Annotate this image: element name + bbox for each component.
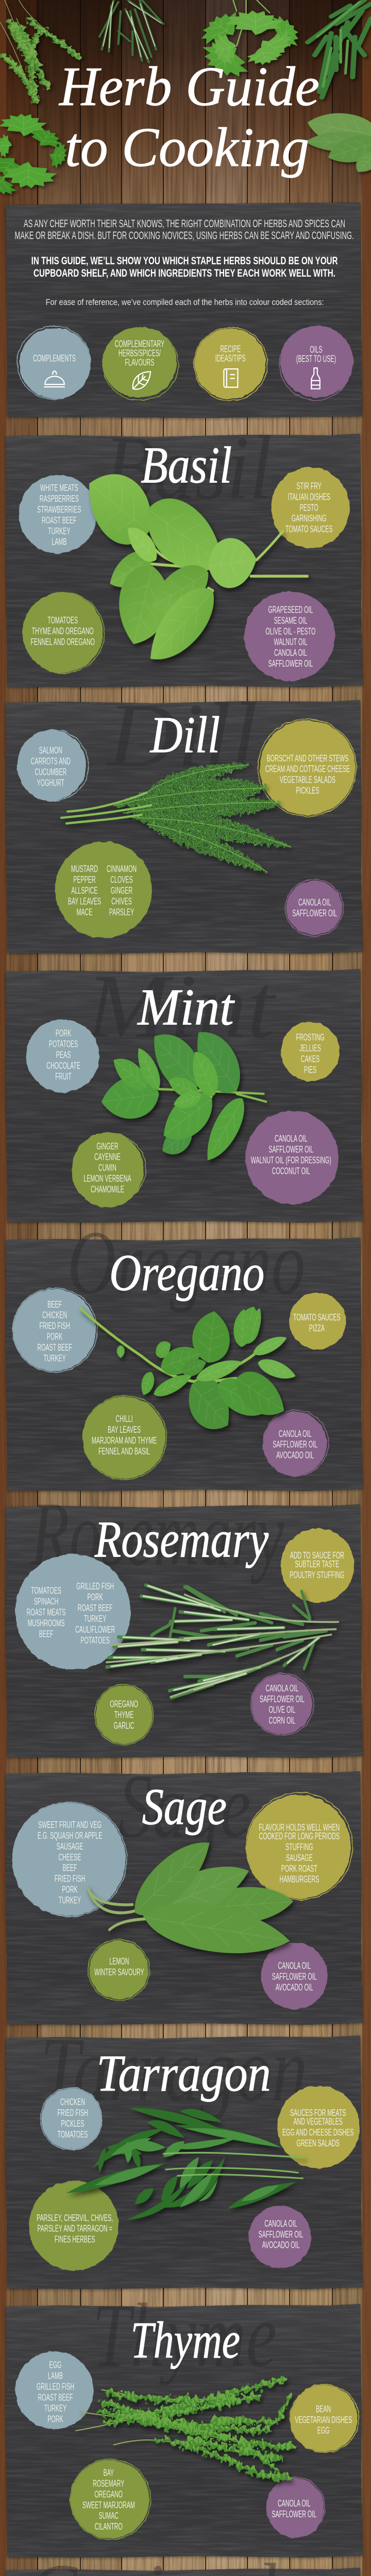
recipes: PICKLES xyxy=(296,786,319,796)
legend: complementary herbs: FLAVOURS xyxy=(125,357,154,368)
herb: rosemary xyxy=(107,1585,339,1698)
complements: ROAST BEEF xyxy=(42,515,77,526)
recipes: STIR FRY xyxy=(296,481,322,492)
complements: BEEF xyxy=(62,1863,77,1874)
herb: coriander xyxy=(193,0,306,83)
complements: TURKEY xyxy=(44,2403,66,2414)
recipes: BORSCHT AND OTHER STEWS xyxy=(267,753,348,764)
panel: introduction and legend xyxy=(6,202,362,418)
complements: TOMATOES xyxy=(31,1586,61,1597)
recipes: CAKES xyxy=(301,1054,319,1064)
complementary herbs: MUSTARD xyxy=(71,864,98,875)
complements xyxy=(18,730,89,801)
complements: FRUIT xyxy=(55,1071,72,1082)
complementary herbs xyxy=(83,1396,166,1480)
complements: CHICKEN xyxy=(60,2097,85,2108)
complements: E.G. SQUASH OR APPLE xyxy=(38,1831,102,1841)
heading: oregano: Oregano xyxy=(109,1244,264,1302)
complementary herbs: CINNAMON xyxy=(107,864,137,875)
oils: SESAME OIL xyxy=(274,615,307,626)
complements: CARROTS AND xyxy=(31,756,71,767)
complements xyxy=(15,1554,130,1670)
ghost heading: Sage xyxy=(119,1755,251,1857)
recipes: TOMATO SAUCES xyxy=(293,1312,341,1323)
heading: tarragon: Tarragon xyxy=(96,2045,271,2103)
intro text xyxy=(14,218,353,242)
oils: CORN OIL xyxy=(268,1716,295,1726)
complements: TURKEY xyxy=(43,1353,66,1364)
complements: CAULIFLOWER xyxy=(75,1624,115,1635)
complementary herbs: PEPPER xyxy=(73,875,96,886)
complementary herbs: OREGANO xyxy=(110,1699,138,1709)
complementary herbs: ROSEMARY xyxy=(93,2478,124,2489)
complements: SAUSAGE xyxy=(57,1841,83,1852)
complementary herbs: GINGER xyxy=(96,1141,119,1152)
recipes: GREEN SALADS xyxy=(297,2138,340,2149)
complements: YOGHURT xyxy=(37,777,64,788)
heading: dill: Dill xyxy=(150,706,220,764)
recipes: GARNISHING xyxy=(292,513,327,524)
complements: PORK xyxy=(62,1885,78,1895)
recipes: EGG AND CHEESE DISHES xyxy=(282,2127,353,2138)
legend: complementary herbs: HERBS/SPICES/ xyxy=(119,348,161,359)
complementary herbs: BAY LEAVES xyxy=(68,896,101,907)
complements: ROAST BEEF xyxy=(38,2393,73,2403)
oils: CANOLA OIL xyxy=(275,1133,308,1144)
complementary herbs: SUMAC xyxy=(98,2511,119,2521)
complements: TOMATOES xyxy=(58,2129,88,2140)
ghost heading: Rosemary xyxy=(30,1483,284,1584)
panel: tarragon xyxy=(6,2019,363,2289)
oils xyxy=(249,2206,311,2268)
recipes: HAMBURGERS xyxy=(280,1874,319,1885)
oils: WALNUT OIL (FOR DRESSING) xyxy=(251,1155,331,1166)
herb: sage xyxy=(302,107,371,176)
icon: oil bottle xyxy=(311,368,320,389)
complementary herbs: TOMATOES xyxy=(47,615,78,626)
complementary herbs xyxy=(55,841,152,938)
oils: CANOLA OIL xyxy=(279,1429,311,1439)
herb: parsley xyxy=(0,114,70,199)
heading: basil: Basil xyxy=(141,436,232,494)
complements: PEAS xyxy=(56,1050,71,1060)
legend: complementary herbs: COMPLEMENTARY xyxy=(115,338,164,349)
icon: leaf xyxy=(133,372,150,389)
legend: recipe ideas: IDEAS/TIPS xyxy=(215,353,246,364)
complementary herbs: LEMON VERBENA xyxy=(83,1174,131,1184)
recipes: PIZZA xyxy=(309,1323,325,1334)
oils: AVOCADO OIL xyxy=(276,1982,313,1993)
recipes: PORK ROAST xyxy=(281,1863,317,1874)
recipes xyxy=(281,1022,340,1081)
legend circles xyxy=(18,326,353,400)
panel: basil xyxy=(6,417,363,687)
recipes: POULTRY STUFFING xyxy=(290,1570,344,1581)
legend: complements: COMPLEMENTS xyxy=(33,353,76,364)
complementary herbs: GARLIC xyxy=(114,1720,134,1731)
oils: WALNUT OIL xyxy=(274,637,307,648)
complements: RASPBERRIES xyxy=(40,494,79,504)
complements: EGG xyxy=(49,2360,61,2371)
complementary herbs: CLOVES xyxy=(110,875,133,886)
complements: POTATOES xyxy=(80,1635,110,1646)
panel: coriander xyxy=(6,2545,363,2576)
oils: SAFFLOWER OIL xyxy=(259,2229,303,2240)
complementary herbs: CHILLI xyxy=(115,1414,133,1425)
complements: STRAWBERRIES xyxy=(37,504,81,515)
oils: CANOLA OIL xyxy=(278,2498,311,2509)
oils xyxy=(285,879,343,936)
panel: rosemary xyxy=(6,1483,363,1758)
recipes xyxy=(246,1792,352,1900)
legend note: For ease of reference, we’ve compiled each of the herbs into colour coded sections: xyxy=(46,297,324,307)
herb: thyme bunch xyxy=(0,0,82,104)
oils: SAFFLOWER OIL xyxy=(292,908,337,919)
recipes: TOMATO SAUCES xyxy=(285,524,332,535)
complements: POTATOES xyxy=(49,1039,78,1049)
heading: mint: Mint xyxy=(137,978,235,1036)
herb: mint xyxy=(99,1018,266,1170)
complementary herbs: FENNEL AND BASIL xyxy=(98,1446,150,1457)
legend: recipe ideas: RECIPE xyxy=(220,344,241,355)
complementary herbs: MACE xyxy=(76,907,92,918)
recipes: STUFFING xyxy=(285,1842,313,1853)
complementary herbs: PARSLEY, CHERVIL, CHIVES, xyxy=(37,2213,113,2224)
complementary herbs xyxy=(70,2459,150,2539)
ghost heading: Thyme xyxy=(92,2284,277,2386)
intro bold text xyxy=(31,255,338,279)
heading: sage: Sage xyxy=(142,1778,227,1836)
recipes: ADD TO SAUCE FOR xyxy=(290,1550,344,1561)
herb: rosemary sprig xyxy=(99,0,163,62)
oils: OLIVE OIL - PESTO xyxy=(265,626,315,637)
complements: GRILLED FISH xyxy=(37,2382,74,2393)
complementary herbs: OREGANO xyxy=(94,2489,123,2500)
complementary herbs: THYME xyxy=(114,1709,133,1720)
heading: thyme: Thyme xyxy=(130,2312,240,2369)
complements xyxy=(12,1288,97,1372)
complementary herbs: CUMIN xyxy=(98,1163,116,1174)
complementary herbs: CHIVES xyxy=(111,896,132,907)
complements: ROAST BEEF xyxy=(37,1343,72,1353)
recipes xyxy=(290,2384,359,2452)
recipes: ITALIAN DISHES xyxy=(288,492,330,502)
recipes: SAUSAGE xyxy=(286,1853,313,1863)
herb: sage xyxy=(88,1825,294,1964)
complementary herbs: ALLSPICE xyxy=(71,886,98,896)
legend: oils: OILS xyxy=(310,344,323,355)
oils: CANOLA OIL xyxy=(298,897,331,908)
legend: oils xyxy=(279,326,353,400)
oils xyxy=(263,1410,328,1476)
recipes: JELLIES xyxy=(299,1043,321,1054)
icon: book xyxy=(224,369,238,387)
oils: SAFFLOWER OIL xyxy=(268,658,313,669)
complementary herbs: BAY LEAVES xyxy=(108,1425,141,1435)
complements: MUSHROOMS xyxy=(28,1618,65,1629)
complements xyxy=(19,474,97,553)
complements: LAMB xyxy=(48,2371,63,2382)
complements: FRIED FISH xyxy=(55,1874,85,1885)
recipes xyxy=(281,1528,354,1603)
recipes xyxy=(289,1293,346,1349)
ghost heading: Basil xyxy=(104,417,272,518)
complementary herbs: CILANTRO xyxy=(95,2521,123,2532)
complements: SPINACH xyxy=(34,1597,58,1607)
complements: CUCUMBER xyxy=(35,767,66,777)
main title xyxy=(58,56,319,178)
oils: CANOLA OIL xyxy=(274,648,307,658)
recipes: SUBTLER TASTE xyxy=(295,1559,339,1570)
legend: recipe ideas xyxy=(194,327,267,400)
recipes: FLAVOUR HOLDS WELL WHEN xyxy=(259,1822,340,1833)
recipes: FROSTING xyxy=(296,1032,325,1043)
recipes: VEGETARIAN DISHES xyxy=(295,2415,352,2426)
oils: CANOLA OIL xyxy=(278,1961,311,1972)
complements: TURKEY xyxy=(84,1614,106,1624)
main title: to Cooking xyxy=(65,117,309,178)
herb: thyme xyxy=(76,2379,295,2478)
oils: AVOCADO OIL xyxy=(262,2240,300,2251)
legend: oils: (BEST TO USE) xyxy=(296,353,336,364)
oils xyxy=(261,1942,328,2009)
complementary herbs: SWEET MARJORAM xyxy=(82,2500,135,2511)
oils: OLIVE OIL xyxy=(268,1705,295,1716)
complements: PORK xyxy=(47,1332,63,1342)
complementary herbs xyxy=(23,592,104,673)
complements: TURKEY xyxy=(48,526,70,537)
complements: PORK xyxy=(56,1028,72,1039)
ghost heading: Mint xyxy=(85,955,277,1057)
recipes xyxy=(258,719,357,816)
recipes: PESTO xyxy=(300,502,318,513)
oils: SAFFLOWER OIL xyxy=(273,1439,317,1450)
oils xyxy=(266,2478,325,2538)
complements: BEEF xyxy=(39,1629,54,1639)
oils: CANOLA OIL xyxy=(266,1683,298,1694)
complements: PICKLES xyxy=(61,2119,85,2129)
complementary herbs xyxy=(95,1684,154,1745)
complements: WHITE MEATS xyxy=(40,483,78,494)
recipes: EGG xyxy=(317,2426,330,2436)
complementary herbs: BAY xyxy=(103,2468,114,2478)
oils: AVOCADO OIL xyxy=(276,1450,314,1461)
complements: FRIED FISH xyxy=(57,2108,88,2119)
recipes: AND VEGETABLES xyxy=(293,2116,343,2127)
ghost heading: Dill xyxy=(107,684,258,786)
complements xyxy=(15,2351,93,2429)
herb: basil xyxy=(77,455,308,676)
complements: PORK xyxy=(87,1592,103,1603)
complementary herbs xyxy=(72,1132,146,1207)
oils: SAFFLOWER OIL xyxy=(272,2509,316,2520)
oils: GRAPESEED OIL xyxy=(268,604,313,615)
oils xyxy=(251,1673,314,1735)
complementary herbs: THYME AND OREGANO xyxy=(32,626,94,637)
complementary herbs: LEMON xyxy=(109,1956,129,1967)
oils: CANOLA OIL xyxy=(264,2218,297,2229)
hero herbs xyxy=(0,0,371,199)
oils xyxy=(245,1111,339,1204)
complements: FRIED FISH xyxy=(39,1321,70,1332)
recipes xyxy=(271,467,350,548)
complements: ROAST BEEF xyxy=(78,1603,112,1614)
complementary herbs: CHAMOMILE xyxy=(91,1184,124,1195)
icon: cloche xyxy=(44,371,65,387)
recipes: PIES xyxy=(304,1064,316,1075)
complements xyxy=(41,2088,102,2150)
oils: SAFFLOWER OIL xyxy=(268,1144,313,1155)
panel: thyme xyxy=(6,2284,363,2557)
herb: tarragon xyxy=(66,2108,305,2220)
panel: dill xyxy=(6,684,363,954)
herb: dill xyxy=(61,764,292,873)
recipes: VEGETABLE SALADS xyxy=(280,775,335,786)
complements: PORK xyxy=(47,2414,63,2425)
complementary herbs: PARSLEY xyxy=(109,907,134,918)
complements: TURKEY xyxy=(59,1895,81,1906)
complements: CHEESE xyxy=(58,1852,81,1863)
ghost heading: Tarragon xyxy=(40,2019,308,2120)
complements: BEEF xyxy=(47,1299,62,1310)
panel: sage xyxy=(6,1755,363,2025)
ghost heading: Oregano xyxy=(68,1212,305,1313)
complementary herbs: CAYENNE xyxy=(94,1152,121,1163)
complementary herbs: MARJORAM AND THYME xyxy=(92,1435,157,1446)
legend: complementary herbs xyxy=(103,327,178,400)
complementary herbs: GINGER xyxy=(111,886,132,896)
complements: SALMON xyxy=(39,745,62,756)
recipes xyxy=(277,2086,360,2168)
complements xyxy=(12,1802,127,1916)
complementary herbs: WINTER SAVOURY xyxy=(94,1967,144,1978)
complements: CHICKEN xyxy=(42,1310,67,1321)
complementary herbs: FENNEL AND OREGANO xyxy=(30,637,95,648)
complements: ROAST MEATS xyxy=(27,1607,65,1618)
complements: LAMB xyxy=(52,537,66,548)
recipes: BEAN xyxy=(316,2404,331,2415)
legend: complements xyxy=(18,326,91,399)
panel: mint xyxy=(6,955,363,1223)
main title: Herb Guide xyxy=(58,56,319,117)
complements xyxy=(26,1020,99,1093)
panel: oregano xyxy=(6,1212,363,1491)
complements: CHOCOLATE xyxy=(46,1060,80,1071)
recipes: CREAM AND COTTAGE CHEESE xyxy=(265,764,350,775)
complements: GRILLED FISH xyxy=(76,1581,114,1592)
recipes: COOKED FOR LONG PERIODS xyxy=(259,1831,340,1842)
complementary herbs: PARSLEY AND TARRAGON = xyxy=(37,2224,112,2234)
oils: SAFFLOWER OIL xyxy=(260,1694,305,1705)
herb: tarragon xyxy=(308,0,371,97)
herb: oregano xyxy=(80,1302,297,1444)
oils: COCONUT OIL xyxy=(272,1166,310,1177)
heading: rosemary: Rosemary xyxy=(94,1511,269,1568)
complements: SWEET FRUIT AND VEG xyxy=(38,1820,102,1831)
oils: SAFFLOWER OIL xyxy=(272,1972,317,1982)
recipes: SAUCES FOR MEATS xyxy=(290,2108,346,2119)
complementary herbs xyxy=(88,1939,149,2001)
oils xyxy=(244,591,335,681)
complementary herbs xyxy=(29,2181,119,2270)
complementary herbs: FINES HERBES xyxy=(55,2234,95,2245)
